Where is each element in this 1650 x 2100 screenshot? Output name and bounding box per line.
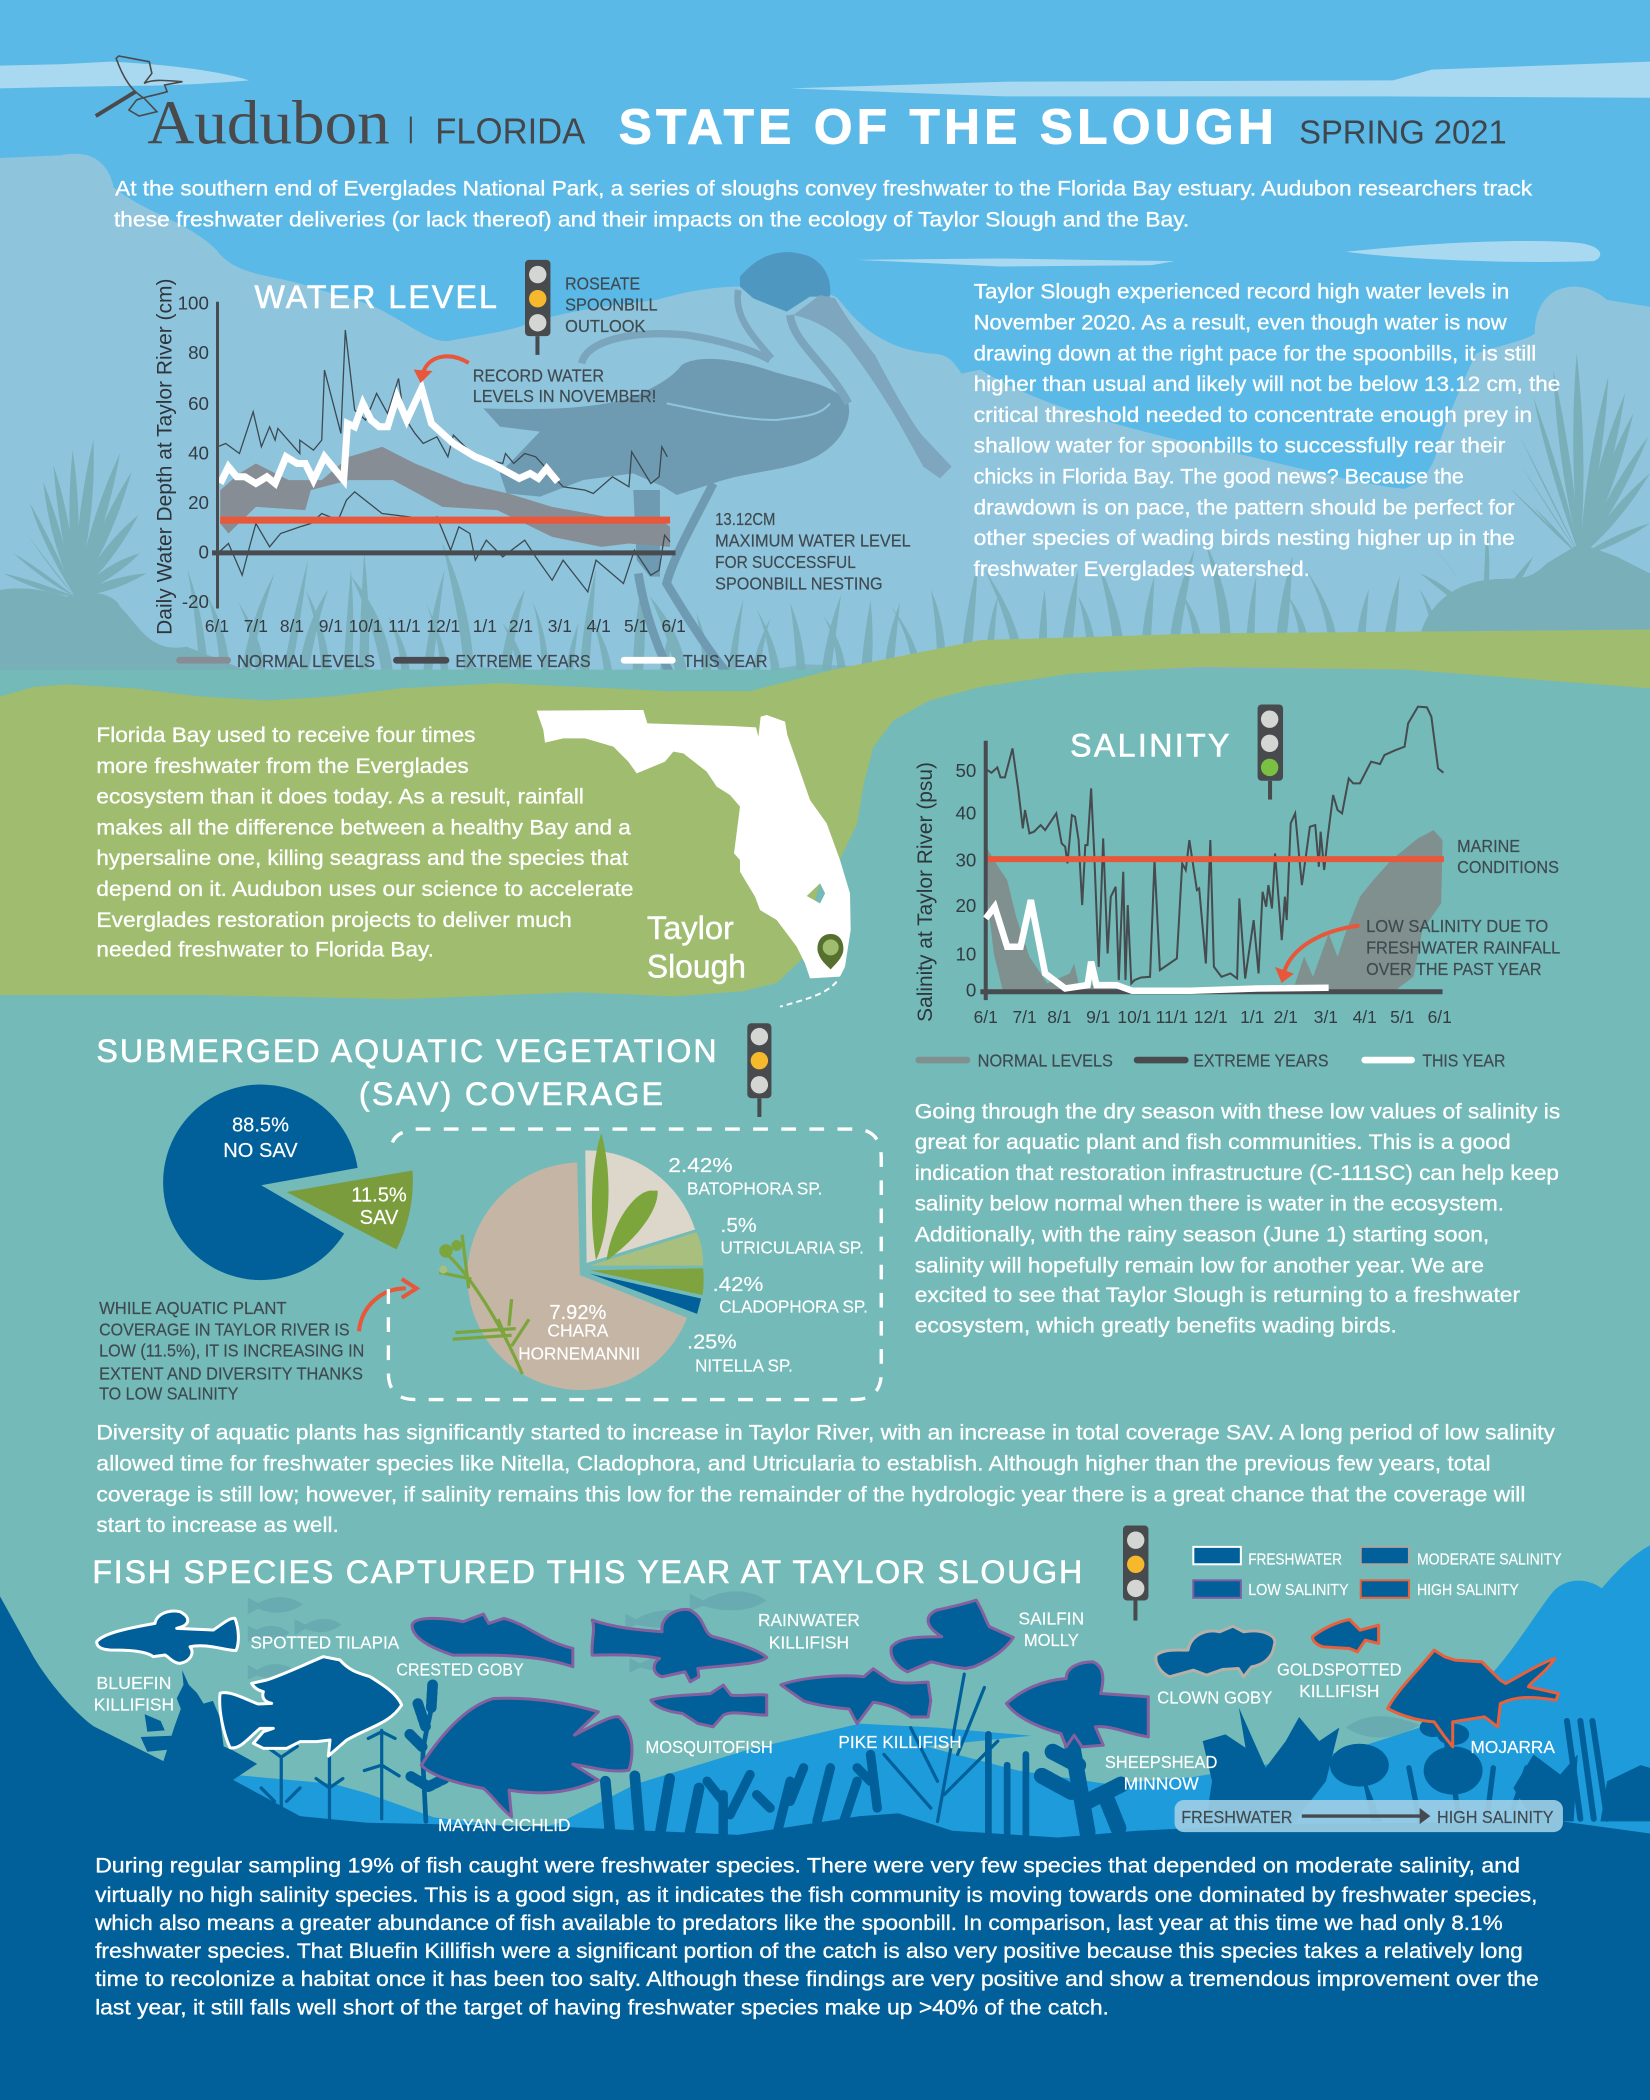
x axis ticks: 2/1 (509, 616, 533, 636)
text block: Taylor Slough water levels (974, 280, 1560, 581)
caption: aquatic plant coverage (99, 1298, 364, 1404)
background: green land band (0, 629, 1650, 999)
callout: maximum water level: FOR SUCCESSFUL (715, 552, 856, 572)
fish labels: MINNOW (1124, 1773, 1199, 1793)
species labels (518, 1155, 868, 1375)
y axis ticks: 0 (966, 979, 976, 1000)
text block: dry season salinity: salinity below normal when there is water in the ecosystem. (915, 1192, 1504, 1216)
caption: aquatic plant coverage: TO LOW SALINITY (99, 1384, 239, 1404)
legend: water level (179, 651, 767, 671)
fish labels: BLUEFIN (96, 1673, 171, 1693)
text: spoonbill outlook: SPOONBILL (565, 295, 658, 315)
text block: diversity of aquatic plants: allowed time for freshwater species like Nitella, Cladophora, and Utricularia to establish. Although higher than the previous few years, total (96, 1452, 1491, 1476)
caption: aquatic plant coverage: COVERAGE IN TAYLOR RIVER IS (99, 1319, 350, 1339)
illustration: seaweed and coral silhouettes (261, 1674, 1607, 1840)
x axis ticks: 6/1 (205, 616, 229, 636)
text block: dry season salinity (915, 1099, 1560, 1338)
x axis ticks: 5/1 (624, 616, 648, 636)
text block: Florida Bay freshwater (96, 723, 633, 961)
x axis ticks: 12/1 (426, 616, 460, 636)
text block: Taylor Slough water levels: higher than usual and likely will not be below 13.12 cm, the (974, 372, 1560, 396)
y axis label: Salinity at Taylor River (psu) (913, 762, 937, 1022)
icon: egret line drawing (96, 56, 182, 116)
background: faint school of fish (248, 1591, 1420, 1737)
legend: salinity (919, 1051, 1505, 1071)
pie chart: no SAV vs SAV: 88.5% (232, 1115, 289, 1137)
icon: plants (439, 1133, 658, 1374)
fish: bluefin killifish (97, 1611, 238, 1663)
chart: water level lines (212, 302, 676, 609)
x axis ticks: 6/1 (662, 616, 686, 636)
text: spoonbill outlook: OUTLOOK (565, 316, 646, 336)
y axis ticks: 20 (955, 895, 976, 916)
fish group: right fish (891, 1600, 1559, 1747)
y axis ticks (955, 760, 976, 1000)
chart: salinity lines (980, 707, 1444, 1000)
scale: freshwater to high salinity: HIGH SALINITY (1437, 1807, 1554, 1827)
dashed box (388, 1129, 881, 1400)
x axis ticks: 12/1 (1194, 1007, 1228, 1027)
callout: low salinity: OVER THE PAST YEAR (1366, 959, 1542, 979)
fish: crested goby (412, 1614, 573, 1667)
x axis ticks: 10/1 (349, 616, 383, 636)
callout: maximum water level: MAXIMUM WATER LEVEL (715, 530, 911, 550)
y axis ticks: 10 (955, 943, 976, 964)
background: dark blue seabed (0, 1596, 1650, 2100)
x axis ticks (974, 1007, 1452, 1027)
arrow: caption to species pie (359, 1279, 417, 1331)
x axis ticks: 7/1 (1012, 1007, 1037, 1027)
text block: Taylor Slough water levels: critical threshold needed to concentrate enough prey in (974, 403, 1532, 427)
intro text: these freshwater deliveries (or lack thereof) and their impacts on the ecology of Taylor Slough and the Bay. (114, 207, 1189, 231)
pie chart: no SAV vs SAV (163, 1085, 413, 1280)
callout: maximum water level: SPOONBILL NESTING (715, 573, 883, 593)
species labels: BATOPHORA SP. (687, 1179, 822, 1199)
callout: maximum water level (715, 509, 911, 593)
fish labels: GOLDSPOTTED (1277, 1659, 1402, 1679)
subtitle: season: SPRING 2021 (1299, 114, 1507, 151)
caption: aquatic plant coverage: WHILE AQUATIC PLANT (99, 1298, 287, 1318)
x axis ticks: 4/1 (1353, 1007, 1377, 1027)
fish labels: PIKE KILLIFISH (838, 1732, 962, 1752)
fish: rainwater killifish (592, 1609, 767, 1682)
scale: freshwater to high salinity (1175, 1800, 1563, 1832)
background: bottom light blue water (230, 1546, 1650, 1875)
legend: water level: EXTREME YEARS (455, 651, 591, 671)
intro text (114, 177, 1532, 231)
species labels: 2.42% (668, 1155, 733, 1177)
text block: Taylor Slough water levels: drawdown is on pace, the pattern should be perfect for (974, 495, 1515, 519)
icon: location pin (818, 934, 843, 969)
panel: salinity chart (913, 704, 1561, 1071)
fish group: left fish (412, 1609, 767, 1817)
divider (410, 117, 412, 143)
scale: freshwater to high salinity: FRESHWATER (1181, 1807, 1292, 1827)
fish: mayan cichlid (421, 1698, 632, 1817)
legend: water level: THIS YEAR (683, 651, 767, 671)
caption: aquatic plant coverage: LOW (11.5%), IT IS INCREASING IN (99, 1341, 364, 1361)
x axis ticks: 2/1 (1274, 1007, 1298, 1027)
text block: Florida Bay freshwater: needed freshwater to Florida Bay. (96, 937, 434, 961)
callout: low salinity (1275, 916, 1561, 983)
text block: fish sampling: last year, it still falls well short of the target of having freshwater species make up >40% of the catch. (95, 1995, 1109, 2019)
illustration: coral mushrooms (141, 1690, 1650, 1824)
y axis ticks (178, 292, 209, 612)
fish labels: MAYAN CICHLID (438, 1815, 571, 1835)
fish labels: MOJARRA (1471, 1737, 1555, 1757)
y axis ticks: 60 (188, 393, 209, 414)
icon: traffic light green (1258, 704, 1283, 800)
fish labels: SHEEPSHEAD (1105, 1752, 1217, 1772)
y axis ticks: 30 (955, 850, 976, 871)
text block: Florida Bay freshwater: Everglades restoration projects to deliver much (96, 908, 572, 932)
text block: Taylor Slough water levels: freshwater Everglades watershed. (974, 557, 1310, 581)
heading: SAV coverage: (SAV) COVERAGE (359, 1076, 663, 1112)
text block: dry season salinity: Going through the dry season with these low values of salinity is (915, 1099, 1560, 1123)
callout: low salinity: LOW SALINITY DUE TO (1366, 916, 1548, 936)
text block: Florida Bay freshwater: hypersaline one, killing seagrass and the species that (96, 846, 628, 870)
fish: clown goby (1156, 1626, 1275, 1677)
legend: water level: NORMAL LEVELS (237, 651, 375, 671)
text block: dry season salinity: ecosystem, which greatly benefits wading birds. (915, 1314, 1397, 1338)
text block: Florida Bay freshwater: makes all the difference between a healthy Bay and a (96, 815, 631, 839)
text block: dry season salinity: excited to see that Taylor Slough is returning to a freshwater (915, 1283, 1520, 1307)
pie chart: SAV species (439, 1133, 704, 1390)
pie chart: no SAV vs SAV: NO SAV (223, 1140, 298, 1162)
y axis ticks: 40 (955, 803, 976, 824)
text block: Taylor Slough water levels: Taylor Slough experienced record high water levels in (974, 280, 1509, 304)
fish labels: KILLIFISH (769, 1633, 849, 1653)
species labels: 7.92% (549, 1302, 607, 1324)
text block: Taylor Slough water levels: chicks in Florida Bay. The good news? Because the (974, 464, 1464, 488)
x axis ticks: 1/1 (473, 616, 497, 636)
map label: Taylor Slough (647, 910, 746, 985)
species labels: .25% (687, 1332, 737, 1354)
y axis label: Daily Water Depth at Taylor River (cm) (152, 279, 176, 635)
text block: diversity of aquatic plants: start to increase as well. (96, 1513, 339, 1537)
icon: traffic light amber (525, 260, 550, 355)
legend: fish salinity classes: MODERATE SALINITY (1417, 1551, 1562, 1568)
species labels: CHARA (547, 1321, 609, 1341)
fish: spotted tilapia (220, 1657, 402, 1756)
fish: pike killifish (781, 1669, 931, 1724)
x axis ticks: 3/1 (1314, 1007, 1338, 1027)
callout: maximum water level: 13.12CM (715, 509, 775, 529)
callout: record water levels: LEVELS IN NOVEMBER! (473, 386, 656, 406)
background: sky streak clouds (0, 62, 1650, 267)
text block: Taylor Slough water levels: other species of wading birds nesting higher up in the (974, 526, 1515, 550)
x axis ticks: 7/1 (244, 616, 268, 636)
species labels: CLADOPHORA SP. (719, 1297, 868, 1317)
title: STATE OF THE SLOUGH (619, 98, 1274, 154)
text block: diversity of aquatic plants (96, 1421, 1555, 1537)
x axis ticks: 6/1 (974, 1007, 998, 1027)
y axis ticks: 40 (188, 442, 209, 463)
x axis ticks: 11/1 (1156, 1007, 1188, 1027)
callout: record water levels: RECORD WATER (473, 366, 604, 386)
callout: marine conditions: MARINE (1457, 836, 1520, 856)
illustration: spoonbill legs (633, 483, 743, 693)
text block: fish sampling: which also means a greater abundance of fish available to predators like the spoonbill. In comparison, last year at this time we had only 8.1% (94, 1911, 1503, 1935)
legend: fish salinity classes: HIGH SALINITY (1417, 1582, 1519, 1599)
text block: Florida Bay freshwater: depend on it. Audubon uses our science to accelerate (96, 877, 633, 901)
background: sky (0, 0, 1650, 750)
text block: fish sampling: time to recolonize a habitat once it has been too salty. Although these findings are very positive and show a tremendous improvement over the (95, 1967, 1539, 1991)
y axis ticks: 100 (178, 292, 209, 313)
fish labels: MOSQUITOFISH (646, 1737, 773, 1757)
x axis ticks: 11/1 (388, 616, 421, 636)
callout: low salinity: FRESHWATER RAINFALL (1366, 938, 1561, 958)
text block: fish sampling: freshwater species. That Bluefin Killifish were a significant portion of the catch is also very positive because this species takes a relatively long (95, 1939, 1523, 1963)
x axis ticks: 10/1 (1117, 1007, 1151, 1027)
text: Audubon wordmark: Audubon (147, 87, 390, 157)
y axis ticks: -20 (182, 591, 209, 612)
species labels: NITELLA SP. (695, 1355, 793, 1375)
text block: Taylor Slough water levels: November 2020. As a result, even though water is now (974, 310, 1507, 334)
text block: fish sampling: During regular sampling 19% of fish caught were freshwater species. There were very few species that depended on moderate salinity, and (95, 1853, 1520, 1877)
y axis ticks: 80 (188, 342, 209, 363)
text block: diversity of aquatic plants: Diversity of aquatic plants has significantly started to increase in Taylor River, with an increase in total coverage SAV. A long period of low salinity (96, 1421, 1555, 1445)
heading: SAV coverage: SUBMERGED AQUATIC VEGETATION (96, 1033, 717, 1069)
header: Audubon logo (96, 56, 586, 157)
fish labels: RAINWATER (758, 1610, 860, 1630)
intro text: At the southern end of Everglades National Park, a series of sloughs convey freshwater to the Florida Bay estuary. Audubon researchers track (115, 177, 1532, 201)
fish labels: KILLIFISH (94, 1694, 174, 1714)
map label: Taylor Slough: Slough (647, 949, 746, 985)
background: teal water (0, 670, 1650, 1875)
map label: Taylor Slough: Taylor (647, 910, 734, 946)
text block: dry season salinity: great for aquatic plant and fish communities. This is a good (915, 1130, 1511, 1154)
x axis ticks (205, 616, 686, 636)
fish: mosquitofish (651, 1685, 767, 1727)
text block: dry season salinity: salinity will hopefully remain low for another year. We are (915, 1253, 1484, 1277)
fish: goldspotted killifish (1312, 1619, 1379, 1652)
fish labels: SPOTTED TILAPIA (250, 1633, 399, 1653)
heading: water level: WATER LEVEL (254, 279, 497, 315)
icon: traffic light amber (1123, 1525, 1148, 1621)
legend: fish salinity classes: FRESHWATER (1248, 1551, 1342, 1568)
y axis ticks: 20 (188, 492, 209, 513)
fish: mojarra (1388, 1650, 1559, 1747)
legend: fish salinity classes (1193, 1547, 1562, 1599)
x axis ticks: 4/1 (587, 616, 611, 636)
fish: sheepshead minnow (1006, 1662, 1148, 1747)
fish group: freshwater fish (97, 1611, 402, 1756)
text block: diversity of aquatic plants: coverage is still low; however, if salinity remains this low for the remainder of the hydrologic year there is a great chance that the coverage will (96, 1482, 1525, 1506)
legend: salinity: THIS YEAR (1422, 1051, 1505, 1071)
text block: Taylor Slough water levels: shallow water for spoonbills to successfully rear their (974, 434, 1505, 458)
legend: salinity: EXTREME YEARS (1193, 1051, 1329, 1071)
text block: fish sampling (94, 1853, 1539, 2019)
pie chart: no SAV vs SAV: 11.5% (351, 1184, 407, 1206)
text: Florida: FLORIDA (435, 110, 586, 151)
y axis ticks: 0 (198, 541, 209, 562)
fish labels: SAILFIN (1019, 1609, 1084, 1629)
fish labels: CRESTED GOBY (396, 1659, 524, 1679)
text block: Florida Bay freshwater: Florida Bay used to receive four times (96, 723, 475, 747)
fish labels: CLOWN GOBY (1157, 1688, 1273, 1708)
pie chart: no SAV vs SAV: SAV (360, 1207, 399, 1229)
x axis ticks: 5/1 (1390, 1007, 1414, 1027)
x axis ticks: 3/1 (548, 616, 572, 636)
x axis ticks: 9/1 (319, 616, 343, 636)
species labels: HORNEMANNII (518, 1343, 640, 1363)
text: spoonbill outlook (565, 273, 658, 336)
heading: fish species: FISH SPECIES CAPTURED THIS YEAR AT TAYLOR SLOUGH (92, 1554, 1082, 1590)
x axis ticks: 1/1 (1240, 1007, 1264, 1027)
heading: salinity: SALINITY (1070, 728, 1229, 764)
panel: SAV coverage (96, 1023, 881, 1404)
caption: aquatic plant coverage: EXTENT AND DIVERSITY THANKS (99, 1363, 363, 1383)
fish: sailfin molly (891, 1600, 1013, 1672)
heading: SAV coverage (96, 1033, 717, 1112)
map: Florida (537, 710, 851, 1007)
panel: water level chart (152, 260, 911, 671)
species labels: UTRICULARIA SP. (721, 1238, 864, 1258)
background: large pale cloud (0, 154, 1650, 710)
illustration: left palm and grass (0, 353, 1650, 704)
text block: Taylor Slough water levels: drawing down at the right pace for the spoonbills, it is still (974, 341, 1536, 365)
text: spoonbill outlook: ROSEATE (565, 273, 640, 293)
text block: fish sampling: virtually no high salinity species. This is a good sign, as it indicates the fish community is moving towards one dominated by freshwater species, (95, 1883, 1538, 1907)
species labels: .42% (712, 1274, 764, 1296)
legend: fish salinity classes: LOW SALINITY (1248, 1582, 1349, 1599)
text block: dry season salinity: indication that restoration infrastructure (C-111SC) can help keep (915, 1161, 1559, 1185)
x axis ticks: 8/1 (280, 616, 304, 636)
species labels: .5% (721, 1215, 757, 1237)
text block: Florida Bay freshwater: ecosystem than it does today. As a result, rainfall (96, 785, 584, 809)
illustration: roseate spoonbill silhouette (483, 252, 952, 497)
x axis ticks: 8/1 (1047, 1007, 1071, 1027)
icon: traffic light amber (747, 1023, 771, 1117)
panel: fish species (92, 1525, 1563, 1835)
fish labels: MOLLY (1024, 1630, 1079, 1650)
callout: record water levels (414, 356, 656, 406)
x axis ticks: 6/1 (1428, 1007, 1452, 1027)
y axis ticks: 50 (955, 760, 976, 781)
callout: marine conditions: CONDITIONS (1457, 857, 1559, 877)
callout: marine conditions (1457, 836, 1559, 877)
fish labels: KILLIFISH (1299, 1681, 1379, 1701)
legend: salinity: NORMAL LEVELS (978, 1051, 1113, 1071)
text block: Florida Bay freshwater: more freshwater from the Everglades (96, 754, 469, 778)
text block: dry season salinity: Additionally, with the rainy season (June 1) starting soon, (915, 1223, 1489, 1247)
fish labels (94, 1609, 1555, 1835)
x axis ticks: 9/1 (1086, 1007, 1110, 1027)
